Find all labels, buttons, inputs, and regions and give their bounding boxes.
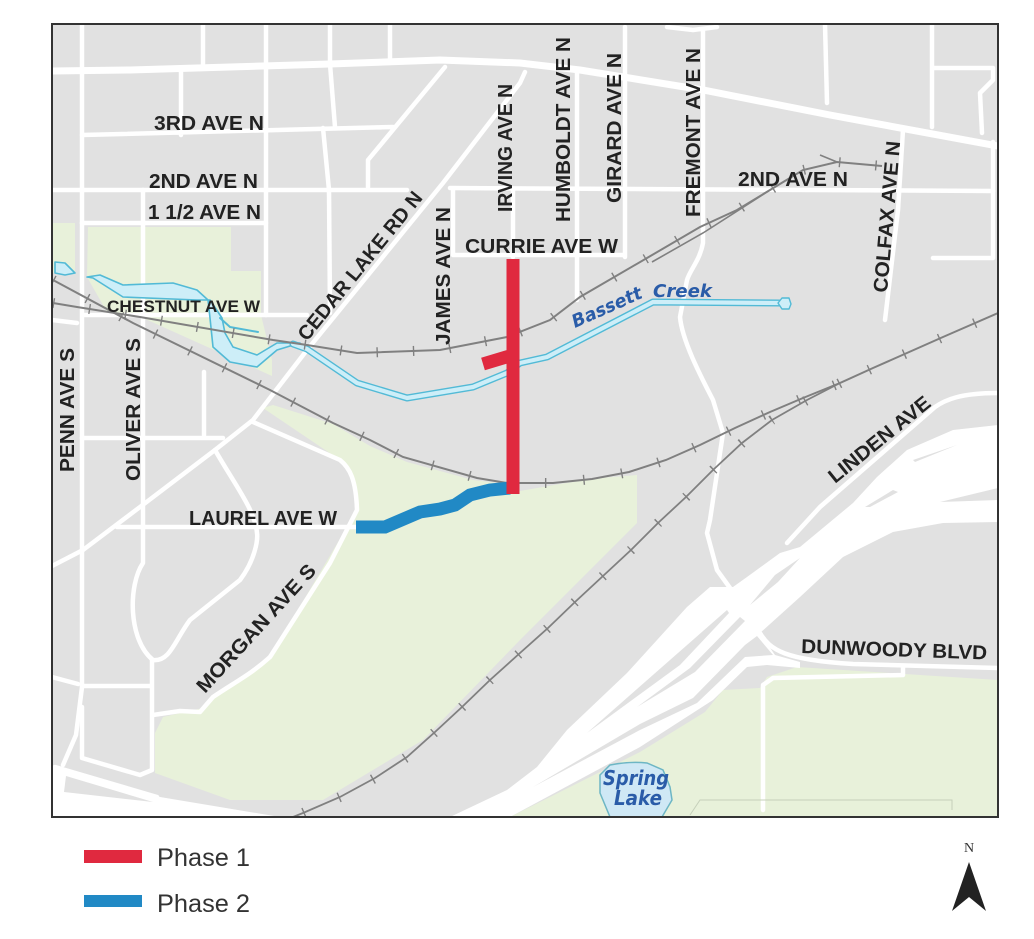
street labels: IRVING AVE N <box>495 84 517 212</box>
water labels: Spring <box>603 766 669 790</box>
Spring Lake water <box>600 762 672 817</box>
water labels: Lake <box>614 786 662 810</box>
street labels: 2ND AVE N <box>738 169 848 191</box>
street labels: GIRARD AVE N <box>604 53 626 203</box>
street labels: FREMONT AVE N <box>683 48 705 217</box>
street labels: OLIVER AVE S <box>123 338 145 481</box>
Phase 2 route <box>356 488 510 527</box>
Phase 1 route <box>483 259 513 494</box>
street labels: 1 1/2 AVE N <box>148 202 261 224</box>
water labels: Creek <box>653 281 713 302</box>
legend: Phase 2: Phase 2 <box>157 890 250 918</box>
icon: north arrow <box>952 841 986 911</box>
icon: north arrow: N <box>964 841 974 856</box>
street labels: CURRIE AVE W <box>465 236 618 258</box>
street labels <box>57 37 987 697</box>
bottom-left white area <box>53 768 273 816</box>
legend: Phase 1 <box>84 844 250 872</box>
map frame <box>52 24 998 817</box>
street labels: DUNWOODY BLVD <box>801 636 987 664</box>
legend: Phase 2 <box>84 890 250 918</box>
water labels: Bassett <box>568 282 647 333</box>
street labels: 3RD AVE N <box>154 113 264 135</box>
parks <box>52 223 998 817</box>
minor roads <box>52 24 998 810</box>
bottom-left wedge <box>64 776 153 802</box>
street labels: LAUREL AVE W <box>189 508 337 530</box>
legend: Phase 1: Phase 1 <box>157 844 250 872</box>
street labels: 2ND AVE N <box>149 171 258 193</box>
main road <box>52 60 998 146</box>
freeway islands <box>533 445 998 787</box>
street labels: CHESTNUT AVE W <box>107 297 261 316</box>
street labels: MORGAN AVE S <box>192 560 321 697</box>
street labels: COLFAX AVE N <box>870 140 905 293</box>
street labels: JAMES AVE N <box>433 207 455 345</box>
street labels: CEDAR LAKE RD N <box>294 188 427 345</box>
street labels: LINDEN AVE <box>824 392 935 488</box>
railroads <box>53 155 998 817</box>
Bassett Creek <box>55 262 791 398</box>
freeway <box>450 425 998 817</box>
water labels <box>568 281 713 810</box>
street labels: PENN AVE S <box>57 348 79 472</box>
street labels: HUMBOLDT AVE N <box>553 37 575 222</box>
park trail <box>690 800 952 815</box>
panel: map <box>52 24 998 817</box>
